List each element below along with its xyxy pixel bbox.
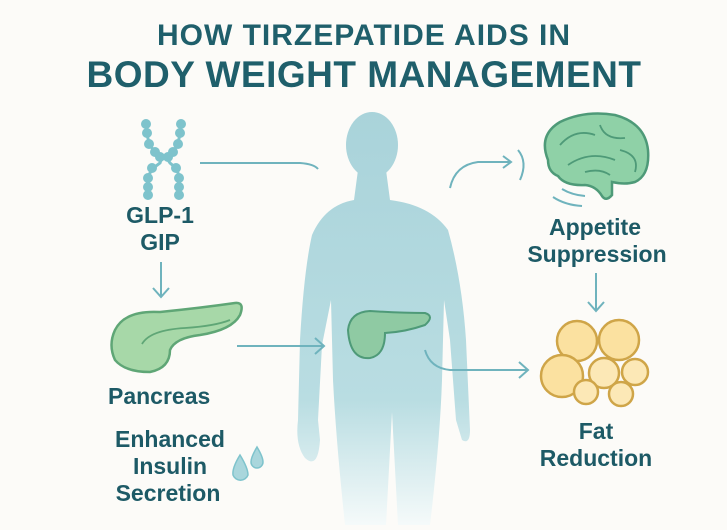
label: GLP-1 GIP: GIP — [140, 229, 180, 255]
icon: GLP-1 GIP molecule — [142, 120, 184, 198]
arrow: pancreas to body — [237, 338, 324, 354]
label: Enhanced Insulin Secretion: Insulin — [133, 453, 207, 479]
title: HOW TIRZEPATIDE AIDS IN — [157, 19, 571, 52]
body silhouette — [297, 112, 470, 525]
icon: pancreas — [112, 303, 242, 372]
title — [86, 19, 642, 95]
icon: brain — [545, 114, 648, 206]
label: Fat Reduction: Reduction — [540, 445, 652, 471]
icon: fat cells — [541, 320, 648, 406]
title: BODY WEIGHT MANAGEMENT — [86, 54, 642, 95]
label: Pancreas: Pancreas — [108, 383, 210, 409]
label: Appetite Suppression — [527, 214, 667, 267]
label: Enhanced Insulin Secretion: Secretion — [116, 480, 220, 506]
icon: insulin drops — [233, 447, 263, 480]
arrow: down to pancreas — [153, 262, 169, 297]
icon: pancreas in body — [348, 311, 430, 358]
label: Appetite Suppression: Suppression — [527, 241, 667, 267]
label: GLP-1 GIP: GLP-1 — [126, 202, 194, 228]
arrow: body to brain — [450, 150, 524, 188]
label: Enhanced Insulin Secretion — [115, 426, 225, 506]
label: Appetite Suppression: Appetite — [549, 214, 641, 240]
label: Fat Reduction: Fat — [579, 418, 614, 444]
label: GLP-1 GIP — [126, 202, 194, 255]
label: Fat Reduction — [540, 418, 652, 471]
arrow: body to fat — [425, 350, 528, 378]
arrow: brain to fat — [588, 273, 604, 311]
arrow: molecule to body — [200, 163, 318, 169]
label: Enhanced Insulin Secretion: Enhanced — [115, 426, 225, 452]
